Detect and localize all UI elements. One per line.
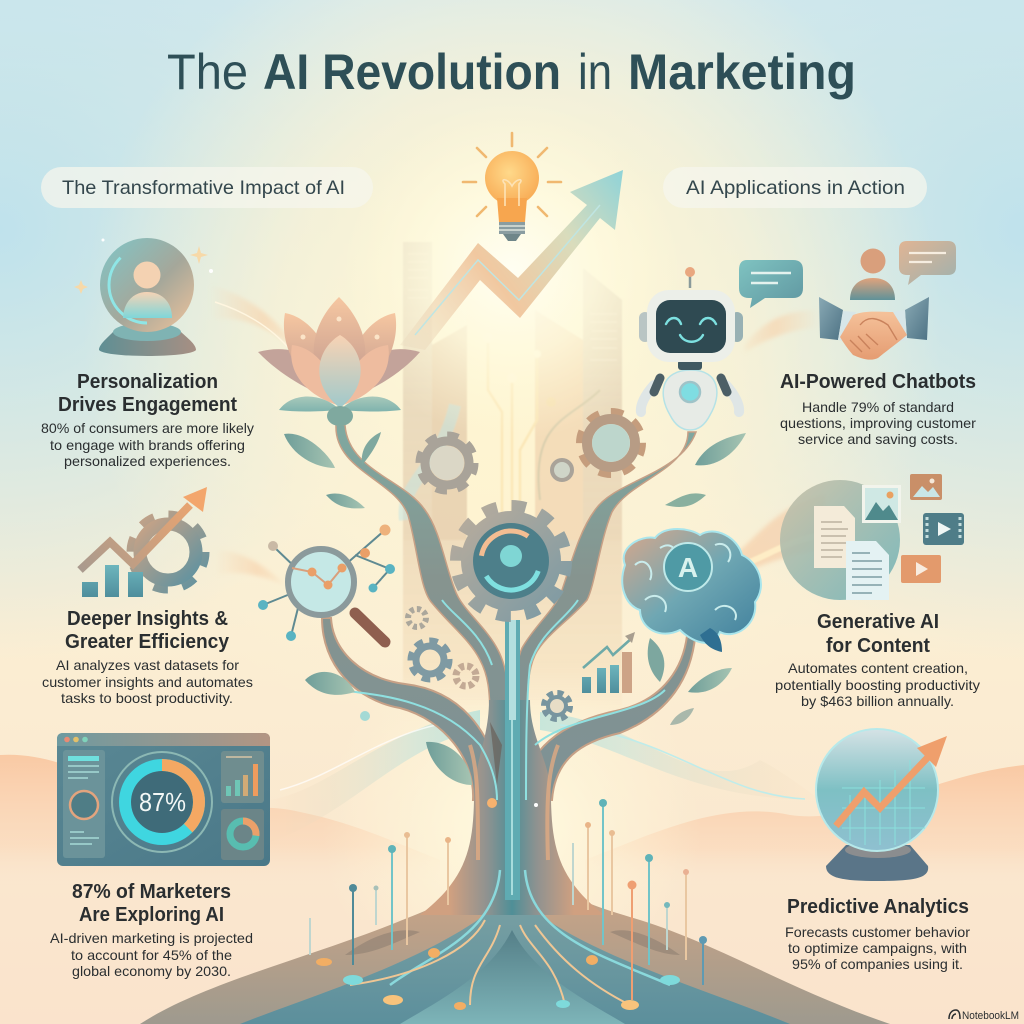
soil layers [240,880,790,1024]
text block: marketers: global economy by 2030. [72,963,231,979]
central gear [457,507,565,615]
text block: marketers [50,881,253,979]
dashboard panel [57,733,270,866]
icon: glowing brain: A [678,552,698,583]
text block: generative: by $463 billion annually. [801,693,954,709]
center column [505,620,520,900]
text block: insights: AI analyzes vast datasets for [56,657,239,673]
text block: marketers: to account for 45% of the [71,947,232,963]
section pill: right [663,167,927,208]
donut mini chart [221,809,264,860]
text block: predictive: Forecasts customer behavior [785,924,970,940]
text block: personalization: Drives Engagement [58,394,237,416]
text block: personalization: Personalization [77,371,218,393]
text block: generative: for Content [826,635,930,657]
wisps and data streams [210,285,825,842]
text block: insights: tasks to boost productivity. [61,690,233,706]
text block: chatbots [780,371,976,447]
text block: generative: Generative AI [817,611,939,633]
text block: insights: Deeper Insights & [67,608,228,630]
text block: personalization: 80% of consumers are more likely [41,420,254,436]
icon: glowing brain [622,529,761,652]
text block: personalization: to engage with brands offering [50,437,245,453]
section pill: left [41,167,373,208]
skyline panel [403,242,622,720]
title: The [167,44,248,100]
glowing lines [340,600,665,800]
icon: handshake with person [819,241,956,360]
text block: generative: Automates content creation, [788,660,968,676]
text block: generative [775,611,980,709]
leaves [305,672,355,695]
text block: generative: potentially boosting productivity [775,677,980,693]
text block: chatbots: questions, improving customer [780,415,976,431]
text block: chatbots: service and saving costs. [798,431,958,447]
branches [322,618,503,800]
icon: robot speech bubble [739,260,803,308]
section pill: left: The Transformative Impact of AI [62,177,345,199]
icon: gear with growth chart [80,487,207,597]
title: Marketing [628,44,856,100]
text block: chatbots: Handle 79% of standard [802,399,954,415]
gauge: 87% [139,787,186,817]
icon: personalization orb [74,238,213,356]
text block: predictive: Predictive Analytics [787,896,969,918]
title: AI Revolution [263,44,561,100]
tree [140,425,890,1024]
title: in [578,44,612,100]
text block: insights: customer insights and automates [42,674,253,690]
section pill: right: AI Applications in Action [686,177,905,199]
text block: marketers: Are Exploring AI [79,904,224,926]
small bar chart [582,632,635,693]
bar mini chart [221,751,264,803]
text block: personalization: personalized experiences. [64,453,231,469]
text block: marketers: AI-driven marketing is projected [50,930,253,946]
title [167,44,856,100]
gauge [112,752,212,852]
sun glow [342,100,682,440]
watermark: NotebookLM [962,1010,1019,1022]
gears [408,413,641,719]
icon: generative content cluster [780,474,964,600]
left panel [63,750,105,858]
icon: robot [639,267,743,430]
icon: lotus flower [258,297,420,426]
text block: predictive [785,896,970,972]
icon: predictive crystal ball [816,729,947,881]
root pins [310,803,703,1000]
text block: insights [42,608,253,706]
trunk [420,700,604,915]
text block: predictive: 95% of companies using it. [792,956,963,972]
text block: marketers: 87% of Marketers [72,881,231,903]
text block: chatbots: AI-Powered Chatbots [780,371,976,393]
text block: predictive: to optimize campaigns, with [788,940,967,956]
icon: light bulb [463,133,561,241]
icon: magnifying glass network [258,524,395,642]
growth arrow [400,170,623,350]
text block: personalization [41,371,254,469]
text block: insights: Greater Efficiency [65,631,230,653]
ground mound [140,860,890,1024]
